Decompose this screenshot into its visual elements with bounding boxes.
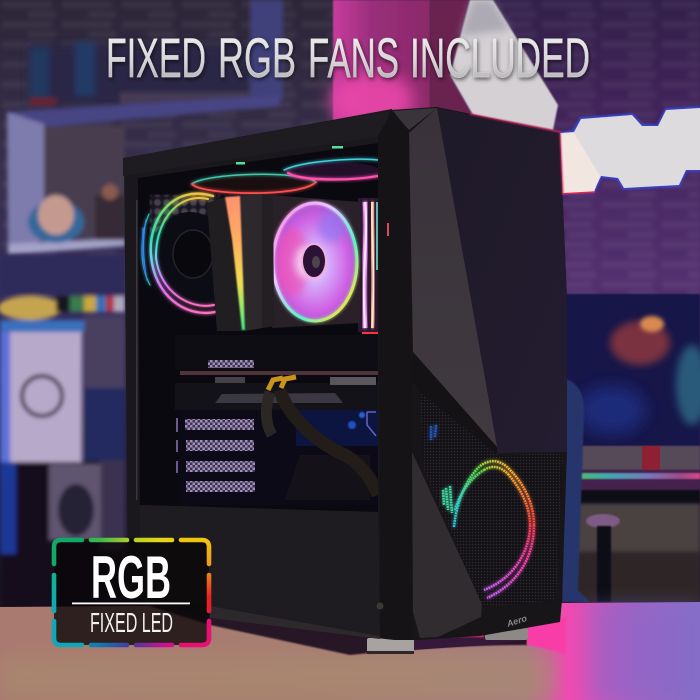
status LEDs bbox=[236, 162, 245, 164]
front fan LED ring bbox=[431, 425, 534, 598]
dark band above mesh bbox=[412, 352, 497, 455]
desk bbox=[0, 600, 700, 700]
brand logo: Aero bbox=[505, 613, 529, 629]
window interior bbox=[138, 143, 378, 512]
badge subtitle: FIXED LED bbox=[90, 607, 173, 638]
title: FIXED bbox=[106, 26, 206, 89]
left frame line bbox=[136, 200, 138, 500]
upper wall shelf bbox=[7, 0, 283, 255]
brick wall texture bbox=[0, 0, 700, 300]
graphics card and cables bbox=[175, 360, 378, 500]
nanoleaf triangle light bbox=[450, 0, 558, 130]
badge rainbow frame bbox=[54, 540, 209, 645]
front mesh bbox=[420, 392, 563, 607]
title: RGB bbox=[218, 26, 296, 89]
PSU shroud bbox=[140, 505, 380, 636]
top edge bbox=[123, 111, 388, 176]
rear panel screws bbox=[376, 602, 384, 610]
badge panel bbox=[54, 539, 209, 645]
lower facet bbox=[412, 452, 482, 638]
title bbox=[106, 26, 590, 89]
RGB badge bbox=[54, 539, 209, 645]
pink glow wall panel bbox=[333, 0, 430, 125]
cooler tower with LED strip bbox=[207, 194, 274, 331]
RAM LED strips bbox=[358, 198, 378, 333]
front upper right face bbox=[437, 108, 567, 453]
side bottom lip bbox=[210, 606, 380, 639]
monitor bbox=[562, 294, 700, 602]
front centre facet bbox=[409, 108, 497, 447]
pink floor glow under case bbox=[527, 618, 566, 654]
pink rim light on top edge bbox=[470, 114, 563, 195]
PC case bbox=[123, 107, 567, 654]
top fan right bbox=[284, 159, 380, 180]
title: FANS bbox=[308, 26, 399, 89]
case feet bbox=[367, 628, 528, 654]
dark magenta wall beside triangle bbox=[430, 0, 473, 116]
badge divider bbox=[72, 602, 190, 604]
side panel body bbox=[124, 109, 394, 640]
title: INCLUDED bbox=[410, 26, 590, 89]
chevron top bbox=[392, 108, 437, 130]
cooler fan bbox=[270, 195, 360, 328]
front frame column bbox=[378, 111, 412, 640]
rear fan bbox=[142, 194, 232, 313]
PCI slot covers bbox=[185, 419, 254, 430]
gaming chair bbox=[562, 378, 590, 602]
badge heading: RGB bbox=[91, 544, 171, 611]
top fan left bbox=[191, 174, 316, 193]
interior components bbox=[142, 159, 380, 505]
case shadow bbox=[130, 600, 527, 655]
nanoleaf hexagon lights bbox=[560, 106, 700, 195]
plush toy bbox=[28, 201, 84, 243]
front panel bbox=[390, 107, 567, 640]
lower left shelf items bbox=[0, 255, 125, 610]
